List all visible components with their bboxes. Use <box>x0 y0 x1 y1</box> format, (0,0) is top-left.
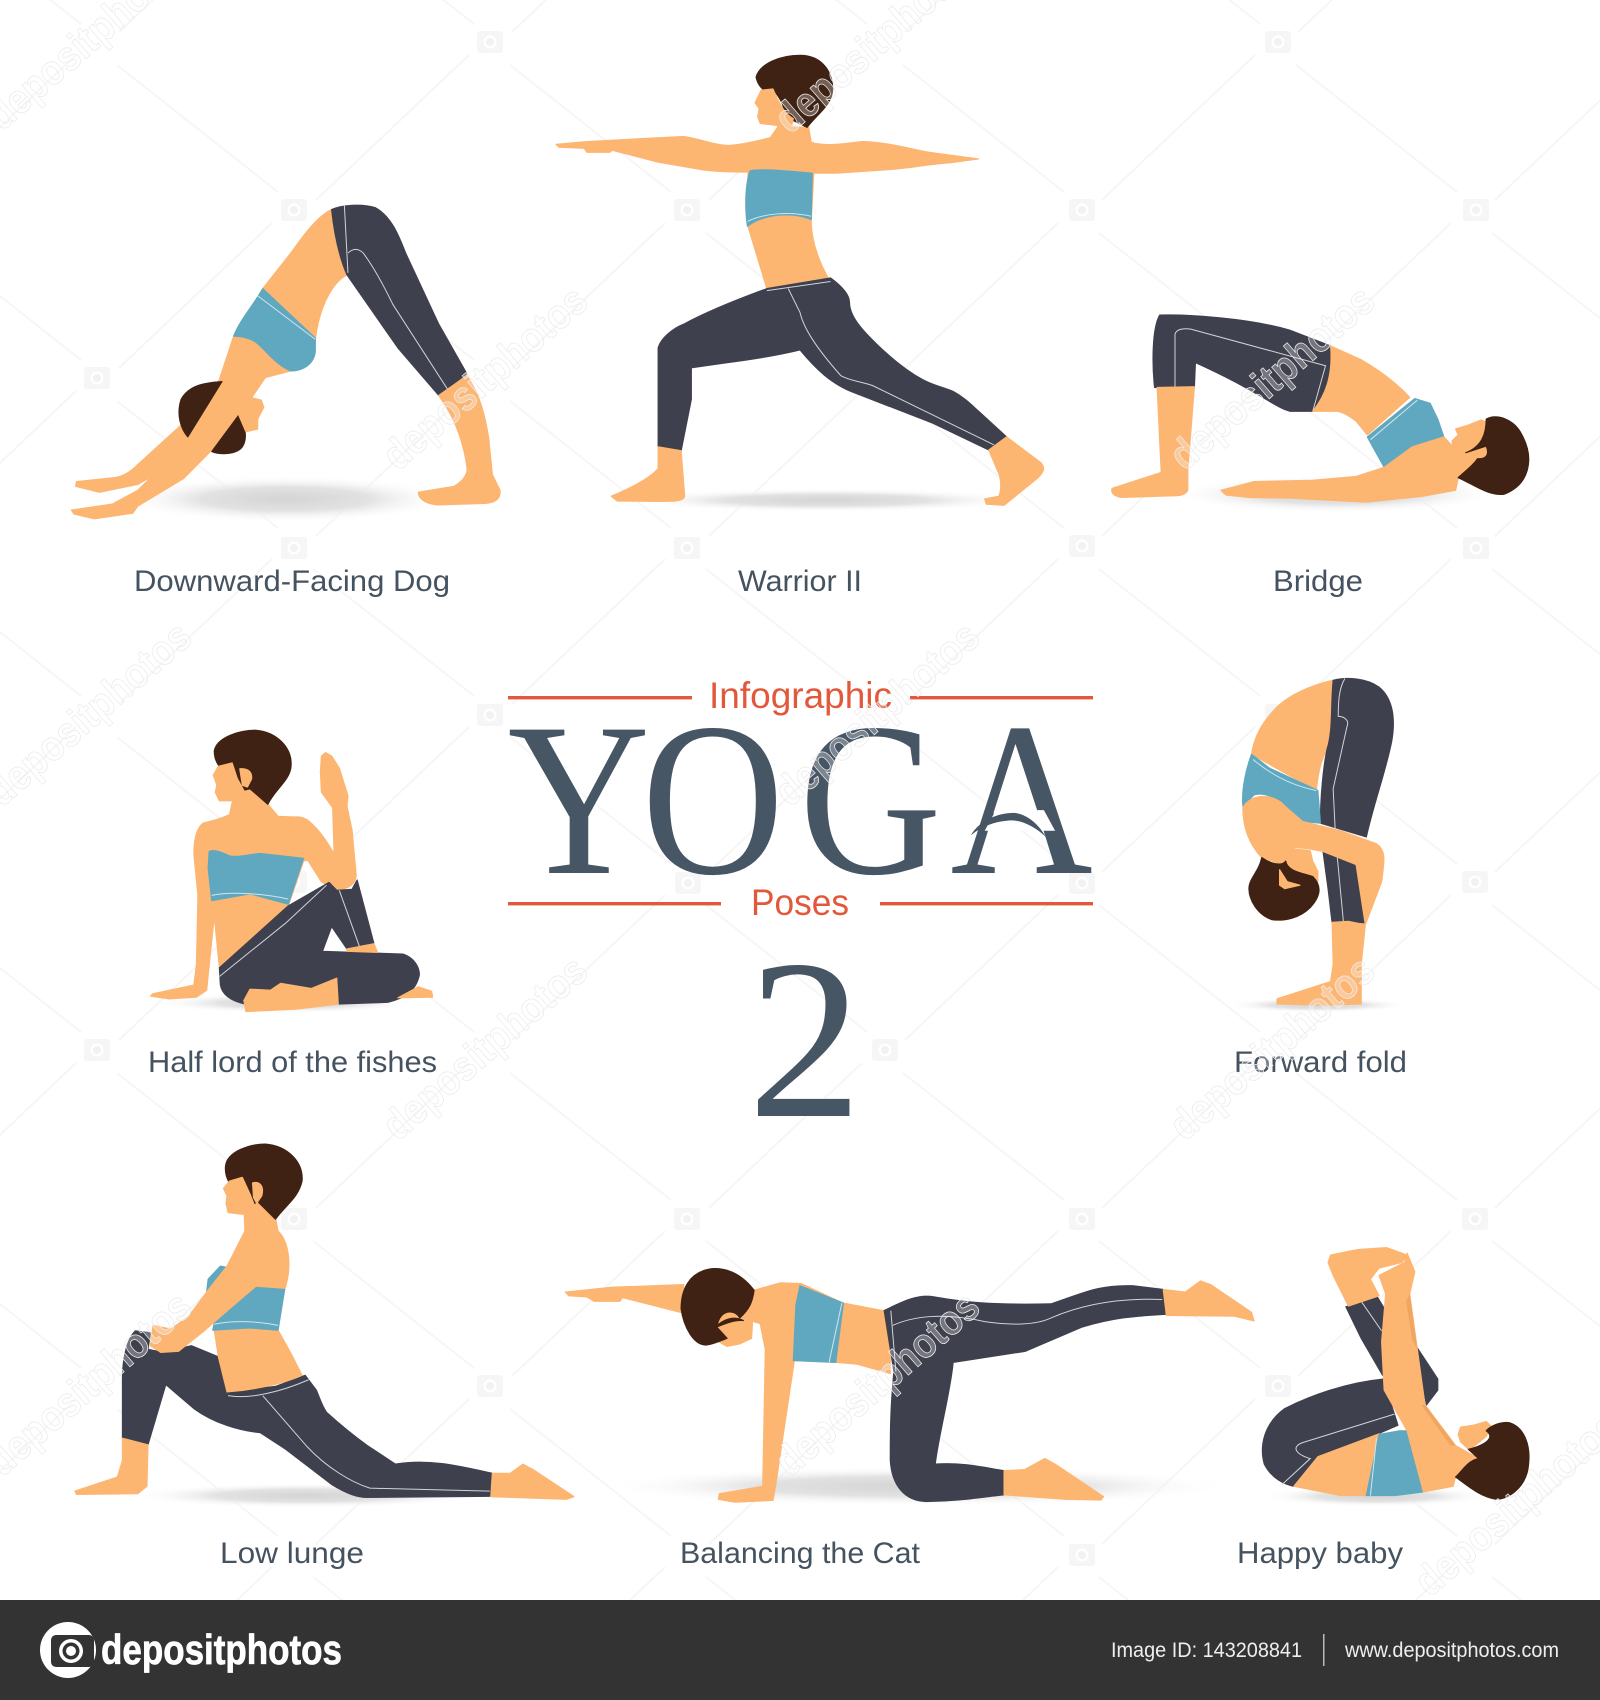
thigh <box>1262 1379 1398 1486</box>
top <box>207 1266 285 1330</box>
raised foot <box>1163 1281 1254 1321</box>
leg and foot <box>1112 387 1194 497</box>
logo wordmark: depositphotos <box>101 1626 342 1673</box>
face <box>223 1177 255 1214</box>
label: Bridge: Bridge <box>1273 565 1363 598</box>
leggings <box>122 1331 492 1497</box>
pose: low lunge <box>75 1144 574 1508</box>
face <box>1282 849 1318 889</box>
arm and hand <box>151 1261 258 1352</box>
ear <box>1280 870 1300 889</box>
label: Warrior II: Warrior II <box>738 565 862 598</box>
Infographic: Infographic <box>709 675 892 716</box>
hair <box>179 382 245 454</box>
ear <box>240 769 252 787</box>
footer bar <box>0 1600 1600 1700</box>
raised forearm and hand <box>306 753 356 890</box>
arms, shoulders and torso <box>556 127 979 289</box>
belly <box>214 1328 302 1392</box>
face <box>1458 1422 1491 1450</box>
watermarks: depositphotos <box>765 1282 988 1485</box>
face and ear <box>717 1309 753 1346</box>
divider <box>1323 1634 1324 1666</box>
label: Balancing the Cat: Balancing the Cat <box>680 1537 921 1570</box>
face <box>755 89 793 129</box>
label: Low lunge: Low lunge <box>220 1537 364 1570</box>
top <box>234 289 315 371</box>
website: www.depositphotos.com <box>1344 1639 1559 1662</box>
pose: half lord of the fishes <box>151 730 433 1013</box>
hair <box>756 55 833 127</box>
lower leg and foot <box>1277 921 1365 1005</box>
leggings <box>658 278 1007 451</box>
front foot <box>611 447 685 501</box>
leggings <box>1153 315 1331 411</box>
label: Half lord of the fishes: Half lord of the fishes <box>148 1046 437 1079</box>
leg and foot <box>418 376 500 505</box>
front foot <box>75 1438 148 1494</box>
face <box>239 397 264 432</box>
top <box>1243 754 1320 823</box>
leggings <box>219 880 419 1004</box>
ear <box>253 1183 262 1203</box>
shoulder and arm <box>1243 797 1384 925</box>
hair <box>681 1269 754 1345</box>
pose: balancing the cat <box>565 1269 1254 1506</box>
YOGA: YOGA <box>508 679 1093 921</box>
belly <box>1313 346 1410 435</box>
pose: forward fold <box>1226 678 1410 1013</box>
leggings <box>884 1286 1166 1501</box>
Poses: Poses <box>751 882 849 923</box>
hair <box>214 730 291 804</box>
label: Happy baby: Happy baby <box>1237 1537 1403 1570</box>
leggings <box>1320 678 1393 923</box>
back foot <box>491 1464 574 1499</box>
arms and torso <box>71 210 347 519</box>
back and supporting arm <box>151 785 334 999</box>
face <box>1452 420 1490 459</box>
label: Forward fold: Forward fold <box>1234 1046 1407 1079</box>
watermarks: depositphotos <box>765 612 988 815</box>
top <box>746 170 812 226</box>
torso <box>227 1203 289 1289</box>
calf behind arm <box>1346 1296 1438 1405</box>
pose: warrior II <box>556 55 1044 512</box>
image id: Image ID: 143208841 <box>1111 1639 1302 1662</box>
forward arm <box>565 1285 684 1313</box>
hair <box>1458 417 1529 494</box>
calf strip <box>347 944 378 952</box>
label: Downward-Facing Dog: Downward-Facing Dog <box>134 565 450 598</box>
top <box>793 1286 843 1362</box>
pose: bridge <box>1112 315 1529 513</box>
rule lines <box>508 696 1093 905</box>
arms and shoulders <box>1379 1253 1479 1492</box>
belly <box>1294 1434 1379 1496</box>
back <box>1252 680 1333 790</box>
tucked foot <box>244 978 338 1012</box>
leggings <box>332 205 467 395</box>
other foot <box>398 987 433 998</box>
number 2: 2 <box>748 914 862 1166</box>
hair <box>1456 1422 1529 1499</box>
watermarks: depositphotos <box>373 276 596 479</box>
title block <box>508 675 1093 1166</box>
back foot <box>985 437 1044 505</box>
hair <box>225 1144 302 1219</box>
face <box>213 763 244 801</box>
top <box>1366 1431 1423 1496</box>
watermarks: depositphotos <box>373 946 596 1149</box>
lower foot <box>1004 1459 1104 1500</box>
top <box>1367 399 1444 467</box>
pose: happy baby <box>1262 1248 1529 1507</box>
body and support arm <box>718 1283 890 1502</box>
logo icon <box>40 1622 96 1678</box>
pose: downward-facing dog <box>71 205 500 523</box>
foot <box>1328 1248 1407 1306</box>
watermarks: depositphotos <box>1160 946 1383 1149</box>
top <box>208 851 304 904</box>
shoulder and arm <box>1221 437 1481 502</box>
hair <box>1249 858 1319 920</box>
arm shading <box>1406 1294 1456 1446</box>
watermarks: depositphotos <box>1160 276 1383 479</box>
A crossbar swoosh <box>971 810 1055 837</box>
